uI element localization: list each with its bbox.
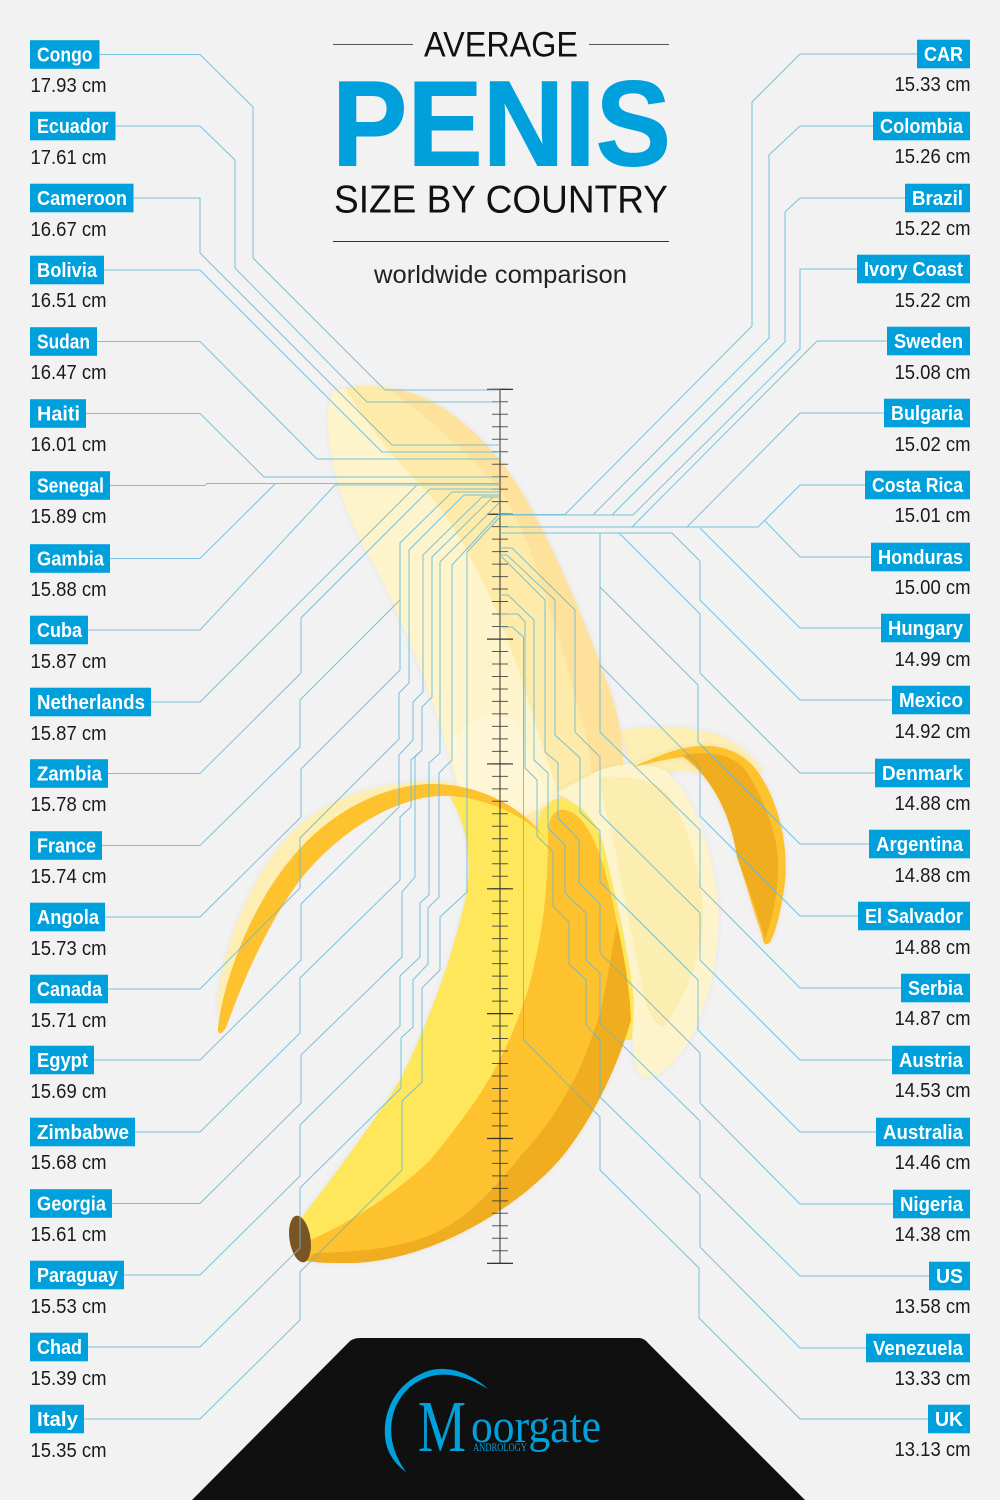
banana orange layer bbox=[303, 810, 631, 1263]
label: Cuba bbox=[30, 616, 106, 673]
label: Egypt: Egypt bbox=[37, 1050, 88, 1072]
label: Sweden bbox=[887, 327, 970, 384]
label: Egypt: 15.69 cm bbox=[30, 1081, 106, 1103]
label: Zimbabwe: 15.68 cm bbox=[30, 1152, 106, 1174]
label: Netherlands: 15.87 cm bbox=[30, 723, 106, 745]
label: Chad bbox=[30, 1333, 106, 1390]
heading: average: AVERAGE bbox=[424, 26, 578, 65]
label: Nigeria bbox=[893, 1190, 970, 1246]
label: Georgia: Georgia bbox=[37, 1194, 107, 1216]
label: Cuba: Cuba bbox=[37, 620, 83, 642]
logo: moorgate bbox=[385, 1369, 601, 1472]
label: Angola: Angola bbox=[37, 907, 100, 929]
label: Brazil bbox=[894, 184, 970, 240]
label: Denmark: 14.88 cm bbox=[894, 793, 970, 815]
label: Sudan: 16.47 cm bbox=[30, 362, 106, 384]
label: Colombia: 15.26 cm bbox=[894, 146, 970, 168]
label: Brazil: Brazil bbox=[912, 188, 963, 210]
label: Gambia bbox=[30, 544, 110, 601]
label: Angola: 15.73 cm bbox=[30, 938, 106, 960]
label: Italy: Italy bbox=[37, 1409, 79, 1431]
label: Mexico bbox=[892, 686, 970, 743]
label: El Salvador: 14.88 cm bbox=[894, 937, 970, 959]
label: France bbox=[30, 831, 106, 888]
label: Argentina bbox=[869, 830, 970, 887]
label: Serbia: 14.87 cm bbox=[894, 1008, 970, 1030]
label: Austria: 14.53 cm bbox=[894, 1080, 970, 1102]
label: Zimbabwe: Zimbabwe bbox=[37, 1122, 129, 1144]
label: El Salvador bbox=[858, 902, 970, 959]
label: CAR: 15.33 cm bbox=[894, 74, 970, 96]
ghost banana bbox=[328, 386, 623, 840]
label: Costa Rica: 15.01 cm bbox=[894, 505, 970, 527]
label: Honduras: 15.00 cm bbox=[894, 577, 970, 599]
label: Haiti bbox=[30, 399, 106, 456]
label: Venezuela: Venezuela bbox=[873, 1338, 964, 1360]
label: UK bbox=[894, 1405, 970, 1461]
label: Gambia: 15.88 cm bbox=[30, 579, 106, 601]
logo wordmark: M bbox=[418, 1386, 466, 1467]
label: Ecuador: Ecuador bbox=[37, 116, 109, 138]
label: Congo: Congo bbox=[37, 44, 92, 66]
label: Nigeria: Nigeria bbox=[900, 1194, 964, 1216]
title bbox=[332, 26, 671, 289]
label: Italy bbox=[30, 1405, 106, 1462]
logo: moorgate: oorgate bbox=[471, 1400, 601, 1453]
label: France: 15.74 cm bbox=[30, 866, 106, 888]
logo: moorgate: ANDROLOGY bbox=[473, 1440, 527, 1454]
banana stem bbox=[286, 1214, 314, 1264]
label: Argentina: Argentina bbox=[876, 834, 964, 856]
label: Ecuador bbox=[30, 112, 116, 169]
label: Venezuela: 13.33 cm bbox=[894, 1368, 970, 1390]
logo arc bbox=[385, 1369, 488, 1472]
label: Denmark: Denmark bbox=[882, 763, 964, 785]
label: Sweden: Sweden bbox=[894, 331, 963, 353]
label: Netherlands: Netherlands bbox=[37, 692, 145, 714]
label: Hungary bbox=[881, 614, 970, 671]
label: Congo: 17.93 cm bbox=[30, 75, 106, 97]
left peel orange bbox=[218, 784, 550, 1033]
label: Georgia: 15.61 cm bbox=[30, 1224, 106, 1246]
label: Australia bbox=[876, 1118, 970, 1174]
label: Australia: Australia bbox=[883, 1122, 964, 1144]
label: Bulgaria bbox=[884, 399, 970, 456]
label: Senegal: 15.89 cm bbox=[30, 506, 106, 528]
label: Gambia: Gambia bbox=[37, 548, 105, 570]
label: Paraguay: 15.53 cm bbox=[30, 1296, 106, 1318]
label: Angola bbox=[30, 903, 106, 960]
label: Venezuela bbox=[866, 1334, 970, 1390]
heading: size by country: SIZE BY COUNTRY bbox=[334, 179, 668, 222]
label: Honduras: Honduras bbox=[878, 547, 963, 569]
label: US bbox=[894, 1262, 970, 1318]
banana dark layer bbox=[303, 923, 631, 1263]
label: Sweden: 15.08 cm bbox=[894, 362, 970, 384]
label: Colombia bbox=[873, 112, 970, 168]
label: Chad: 15.39 cm bbox=[30, 1368, 106, 1390]
label: Bolivia: 16.51 cm bbox=[30, 290, 106, 312]
label: US: US bbox=[936, 1266, 963, 1288]
label: Chad: Chad bbox=[37, 1337, 82, 1359]
subtitle: worldwide comparison bbox=[373, 261, 627, 289]
label: Cameroon: 16.67 cm bbox=[30, 219, 106, 241]
label: US: 13.58 cm bbox=[894, 1296, 970, 1318]
label: Ivory Coast: Ivory Coast bbox=[864, 259, 963, 281]
label: Argentina: 14.88 cm bbox=[894, 865, 970, 887]
heading: penis: PENIS bbox=[332, 56, 671, 192]
label: Zambia: 15.78 cm bbox=[30, 794, 106, 816]
label: Bulgaria: 15.02 cm bbox=[894, 434, 970, 456]
label: Australia: 14.46 cm bbox=[894, 1152, 970, 1174]
label: Costa Rica: Costa Rica bbox=[872, 475, 964, 497]
label: Italy: 15.35 cm bbox=[30, 1440, 106, 1462]
left peel pale bbox=[217, 781, 470, 1030]
footer panel bbox=[192, 1338, 805, 1500]
connector lines bbox=[84, 54, 929, 1419]
label: Netherlands bbox=[30, 688, 151, 745]
label: Serbia: Serbia bbox=[908, 978, 964, 1000]
label: Cuba: 15.87 cm bbox=[30, 651, 106, 673]
label: Costa Rica bbox=[865, 471, 970, 527]
label: Nigeria: 14.38 cm bbox=[894, 1224, 970, 1246]
label: Mexico: 14.92 cm bbox=[894, 721, 970, 743]
label: CAR bbox=[894, 40, 970, 96]
label: Haiti: 16.01 cm bbox=[30, 434, 106, 456]
label: Senegal bbox=[30, 471, 110, 528]
label: Congo bbox=[30, 40, 106, 97]
label: Sudan: Sudan bbox=[37, 332, 90, 354]
right cream peel bbox=[555, 764, 719, 1077]
right peel pale arc bbox=[620, 727, 763, 772]
label: Colombia: Colombia bbox=[880, 116, 964, 138]
label: Honduras bbox=[871, 543, 970, 599]
label: UK: UK bbox=[935, 1409, 964, 1431]
label: Canada: 15.71 cm bbox=[30, 1010, 106, 1032]
label: Cameroon bbox=[30, 184, 134, 241]
right peel orange bbox=[632, 746, 786, 944]
label: Zimbabwe bbox=[30, 1118, 135, 1174]
label: Hungary: Hungary bbox=[888, 618, 964, 640]
label: Ecuador: 17.61 cm bbox=[30, 147, 106, 169]
label: Hungary: 14.99 cm bbox=[894, 649, 970, 671]
label: Cameroon: Cameroon bbox=[37, 188, 127, 210]
label: Austria bbox=[892, 1046, 970, 1102]
label: El Salvador: El Salvador bbox=[865, 906, 963, 928]
label: Zambia: Zambia bbox=[37, 764, 103, 786]
label: Bulgaria: Bulgaria bbox=[891, 403, 964, 425]
label: Brazil: 15.22 cm bbox=[894, 218, 970, 240]
label: Mexico: Mexico bbox=[899, 690, 963, 712]
yellow band of right peel bbox=[537, 799, 634, 1040]
label: Zambia bbox=[30, 759, 108, 816]
label: Georgia bbox=[30, 1189, 112, 1246]
label: Sudan bbox=[30, 327, 106, 384]
label: Egypt bbox=[30, 1046, 106, 1103]
label: Haiti: Haiti bbox=[37, 404, 80, 426]
label: UK: 13.13 cm bbox=[894, 1439, 970, 1461]
banana illustration bbox=[217, 386, 786, 1264]
label: Austria: Austria bbox=[899, 1050, 964, 1072]
label: Canada bbox=[30, 975, 108, 1032]
label: Bolivia bbox=[30, 256, 106, 312]
label: Canada: Canada bbox=[37, 979, 103, 1001]
label: Bolivia: Bolivia bbox=[37, 260, 98, 282]
label: Paraguay: Paraguay bbox=[37, 1265, 119, 1287]
label: Senegal: Senegal bbox=[37, 476, 104, 498]
label: Ivory Coast bbox=[857, 255, 970, 312]
banana body yellow bbox=[298, 797, 631, 1263]
ruler bbox=[499, 389, 501, 1264]
label: Serbia bbox=[894, 974, 970, 1030]
label: France: France bbox=[37, 836, 96, 858]
label: Ivory Coast: 15.22 cm bbox=[894, 290, 970, 312]
label: Paraguay bbox=[30, 1261, 124, 1318]
label: Denmark bbox=[875, 759, 970, 815]
label: CAR: CAR bbox=[924, 44, 963, 66]
